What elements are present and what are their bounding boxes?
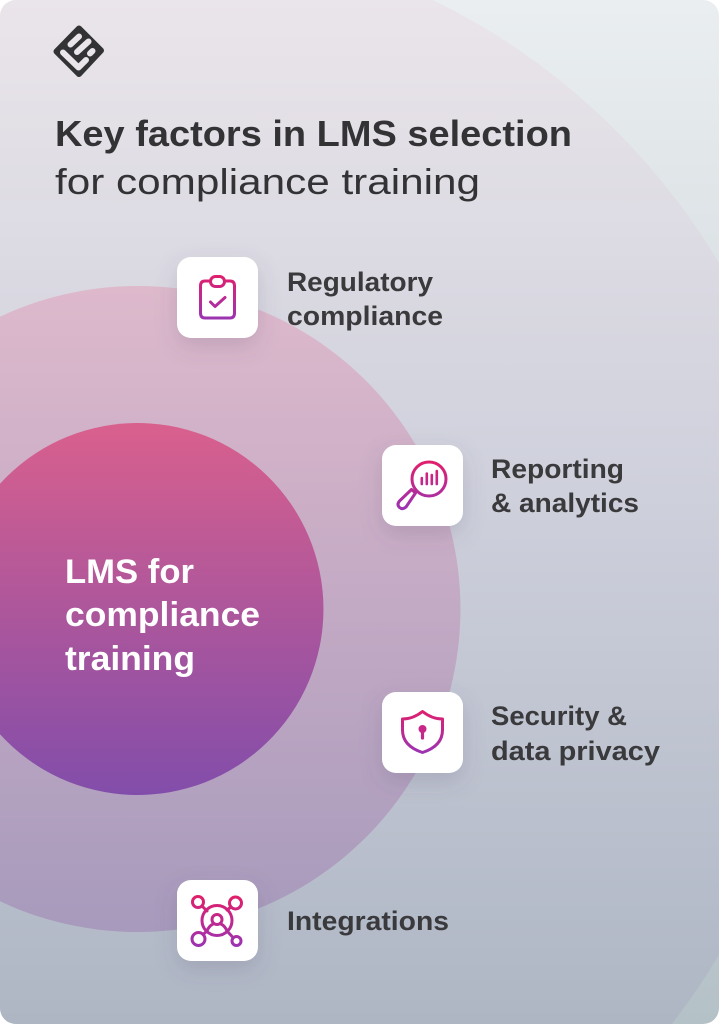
label: & analytics — [491, 488, 639, 518]
center label: LMS for — [65, 553, 194, 591]
factor: security and data privacy — [382, 692, 660, 773]
factor: reporting and analytics — [382, 445, 639, 526]
label — [287, 267, 443, 331]
label: Reporting — [491, 454, 624, 484]
label: Regulatory — [287, 267, 433, 297]
center label — [65, 553, 260, 678]
label — [491, 701, 660, 766]
title — [55, 113, 572, 202]
icon: clipboard — [177, 257, 258, 338]
title: for compliance training — [55, 161, 480, 202]
label: compliance — [287, 301, 443, 331]
label: Integrations — [287, 906, 449, 936]
inner circle: LMS for compliance training — [0, 423, 323, 795]
label: Security & — [491, 701, 627, 731]
factor: integrations — [177, 880, 449, 961]
title: Key factors in LMS selection — [55, 113, 572, 154]
icon: connected user network — [177, 880, 258, 961]
center label: compliance — [65, 596, 260, 634]
center label: training — [65, 640, 195, 678]
label: data privacy — [491, 736, 660, 766]
icon: shield with keyhole — [382, 692, 463, 773]
label — [491, 454, 639, 518]
logo — [56, 28, 101, 74]
middle circle — [0, 286, 460, 932]
factor: regulatory compliance — [177, 257, 443, 338]
icon: magnifier with bars — [382, 445, 463, 526]
